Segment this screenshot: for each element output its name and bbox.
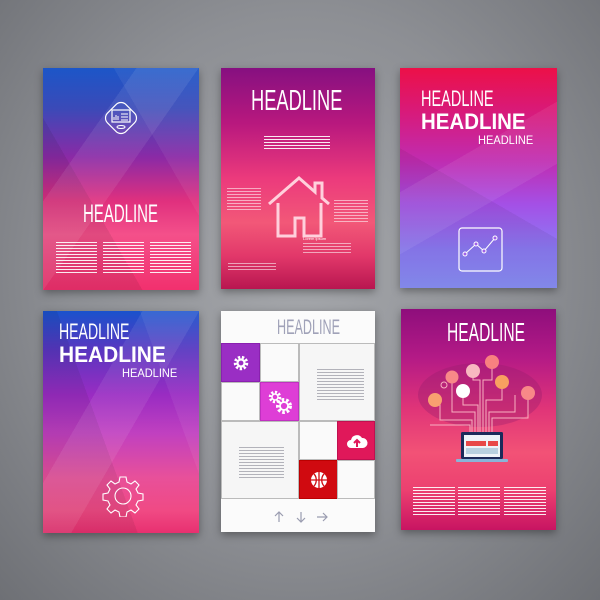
headline group: HEADLINE bbox=[478, 133, 533, 147]
tile: basketball bbox=[299, 460, 338, 499]
text columns bbox=[413, 487, 546, 515]
headline group: HEADLINE bbox=[122, 366, 177, 380]
headline: HEADLINE bbox=[277, 316, 340, 339]
card 3: chart flyer bbox=[400, 68, 557, 288]
headline group: HEADLINE bbox=[59, 319, 129, 344]
headline: HEADLINE bbox=[83, 200, 158, 228]
text box top right bbox=[299, 343, 375, 421]
card 5: white tile flyer bbox=[221, 311, 375, 532]
headline: HEADLINE bbox=[251, 85, 342, 117]
icon: house bbox=[268, 176, 330, 238]
tile grid bbox=[221, 343, 375, 499]
headline: HEADLINE bbox=[447, 317, 525, 347]
footer arrows bbox=[274, 511, 328, 523]
icon: line chart bbox=[458, 227, 503, 272]
tile: magenta gears bbox=[260, 382, 299, 421]
text block bbox=[264, 136, 330, 150]
headline group: HEADLINE bbox=[421, 86, 494, 111]
lorem ipsum caption: Lorem ipsum bbox=[303, 236, 326, 241]
text box bottom left bbox=[221, 421, 299, 499]
icon: gear bbox=[102, 476, 144, 517]
card 4: gear flyer bbox=[43, 311, 199, 533]
headline group: HEADLINE bbox=[421, 109, 526, 134]
card 2: house flyer bbox=[221, 68, 375, 289]
headline group bbox=[59, 319, 177, 380]
small text left bbox=[227, 188, 261, 210]
icon: tree network with laptop bbox=[418, 355, 542, 462]
headline group bbox=[421, 86, 533, 147]
headline group: HEADLINE bbox=[59, 342, 166, 367]
tile: cloud upload bbox=[337, 421, 375, 460]
card 6: network flyer bbox=[401, 309, 556, 530]
tile: purple gear bbox=[221, 343, 260, 382]
icon: presentation screen in diamond bbox=[104, 102, 138, 134]
text columns bbox=[56, 242, 191, 273]
card 1: presentation flyer bbox=[43, 68, 199, 290]
small text right bbox=[334, 200, 368, 222]
